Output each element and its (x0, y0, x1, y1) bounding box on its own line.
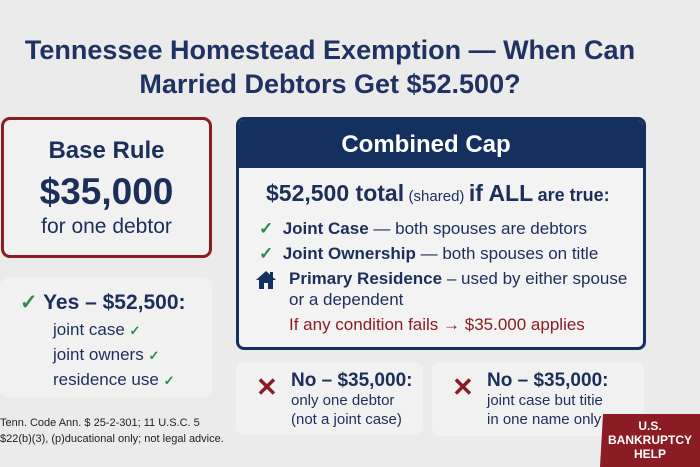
yes list: residence use ✓ (53, 370, 174, 389)
yes list (52, 320, 174, 389)
x icon: ✕ (256, 372, 278, 402)
yes heading: ✓ Yes – $52,500: (20, 291, 186, 314)
text: joint case but titie (487, 392, 603, 409)
title: Married Debtors Get $52.500? (139, 69, 521, 99)
heading: base rule: Base Rule (48, 137, 165, 164)
amount: $35,000 (40, 171, 173, 212)
logo badge: U.S. (638, 419, 662, 433)
panel: base rule (1, 117, 212, 258)
text: No – $35,000: (291, 370, 412, 391)
text: in one name only (487, 411, 601, 428)
subtext: for one debtor (41, 215, 172, 238)
logo badge (600, 414, 700, 467)
title (25, 35, 635, 99)
text: only one debtor (291, 392, 394, 409)
yes list: joint owners ✓ (53, 345, 159, 364)
header bar (209, 120, 643, 168)
text: (not a joint case) (291, 411, 402, 428)
conditions list: ✓ Joint Ownership — both spouses on title (259, 244, 598, 263)
panel: yes (0, 278, 212, 397)
conditions list: or a dependent (289, 290, 403, 309)
citation: Tenn. Code Ann. $ 25-2-301; 11 U.S.C. 5 (0, 417, 200, 429)
panel: no single debtor (236, 362, 423, 435)
conditions list: Primary Residence – used by either spouse (289, 269, 627, 288)
conditions list: ✓ Joint Case — both spouses are debtors (259, 219, 587, 238)
logo badge: BANKRUPTCY (608, 433, 692, 447)
text (291, 370, 412, 428)
title: Tennessee Homestead Exemption — When Can (25, 35, 635, 65)
yes list: joint case ✓ (53, 320, 140, 339)
text: No – $35,000: (487, 370, 608, 391)
total line: $52,500 total (shared) if ALL are true: (266, 180, 610, 206)
header bar: Combined Cap (341, 131, 511, 158)
panel: combined cap (236, 117, 646, 350)
conditions list: If any condition fails → $35.000 applies (289, 315, 585, 334)
citation (0, 417, 224, 445)
logo badge: HELP (634, 447, 666, 461)
x icon: ✕ (452, 372, 474, 402)
text (486, 370, 608, 428)
panel: no title (432, 362, 644, 436)
citation: $22(b)(3), (p)ducational only; not legal advice. (0, 433, 224, 445)
conditions list (256, 219, 627, 334)
